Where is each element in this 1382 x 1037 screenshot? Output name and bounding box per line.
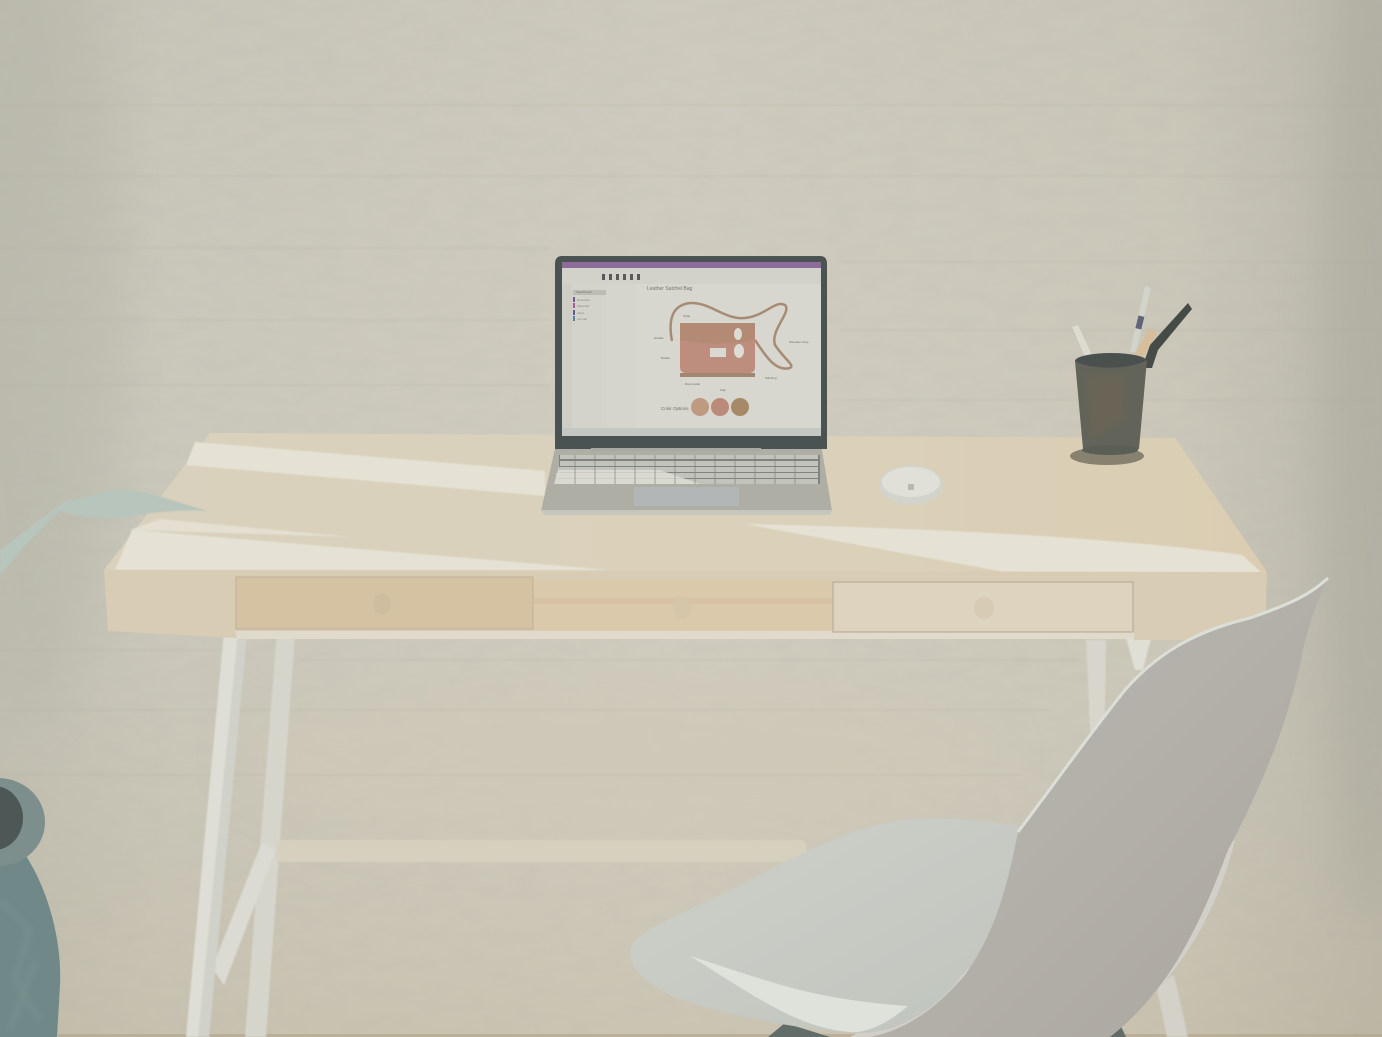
color swatches: Color Options xyxy=(661,406,689,411)
desk xyxy=(104,433,1267,640)
chair base xyxy=(768,1020,1126,1037)
sketch annotations: Buckle xyxy=(661,356,670,360)
laptop lid xyxy=(555,256,827,449)
sketch annotations: Stitching xyxy=(765,376,777,380)
desk top xyxy=(104,433,1267,572)
chair back xyxy=(870,578,1328,1037)
notebook list xyxy=(573,290,606,321)
left drawer xyxy=(236,577,533,629)
mouse xyxy=(879,465,943,505)
front left leg xyxy=(186,632,247,1037)
notebook list: Materials xyxy=(577,304,590,308)
desk front xyxy=(104,570,1267,640)
sketch annotations: Handle xyxy=(654,336,664,340)
sketch annotations: Strap xyxy=(683,314,691,318)
pen cup with pencils xyxy=(1070,286,1192,465)
right drawer xyxy=(833,582,1133,632)
diagonal brace xyxy=(212,842,276,985)
notebook list: Journal xyxy=(577,317,587,321)
note title: Leather Satchel Bag xyxy=(647,286,693,292)
sketch annotations: Shoulder strap xyxy=(789,340,809,344)
notebook list: Sketchbook xyxy=(576,290,592,294)
chair seat xyxy=(630,818,1025,1033)
middle drawer xyxy=(534,580,832,630)
chair xyxy=(630,578,1328,1037)
toolbar glyphs xyxy=(602,274,640,280)
touchpad xyxy=(634,487,739,506)
bag sketch xyxy=(671,303,791,377)
sketch annotations xyxy=(654,314,809,392)
floor strip xyxy=(58,1034,1382,1037)
cup xyxy=(1075,353,1147,369)
sketch annotations: Rivet detail xyxy=(685,382,700,386)
keyboard xyxy=(554,455,820,484)
vase xyxy=(0,778,60,1037)
sketch annotations: Flap xyxy=(720,388,726,392)
chair shell underside xyxy=(850,840,1235,1037)
seat highlight xyxy=(690,956,908,1032)
screen xyxy=(562,262,821,436)
pencils xyxy=(1072,325,1098,368)
laptop xyxy=(541,256,832,515)
desk legs and brace xyxy=(186,632,1188,1037)
laptop base xyxy=(541,444,832,515)
color swatches xyxy=(661,398,749,416)
cross brace xyxy=(276,840,806,862)
notebook list: Ideas xyxy=(577,311,585,315)
sunlight patches xyxy=(115,442,1262,573)
leaf xyxy=(0,489,208,576)
notebook list: Research xyxy=(577,298,590,302)
